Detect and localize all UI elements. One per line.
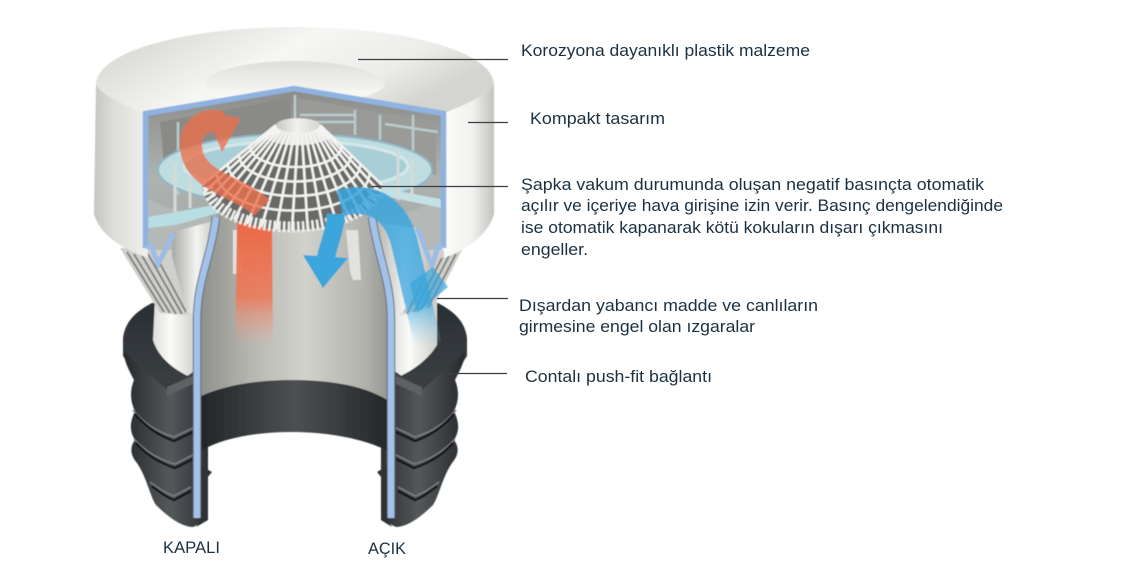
label: corrosion resistant material: Korozyona dayanıklı plastik malzeme bbox=[521, 41, 810, 60]
cone concentric ribs bbox=[217, 146, 370, 211]
vent valve illustration bbox=[94, 27, 494, 527]
rubber bellows left bbox=[124, 352, 208, 527]
lower grille cone bbox=[120, 248, 462, 315]
line 1: Şapka vakum durumunda oluşan negatif basınçta otomatik bbox=[521, 175, 985, 194]
red air flow arrow bbox=[191, 112, 262, 208]
cap top surface bbox=[96, 27, 494, 113]
cone teeth bbox=[208, 187, 376, 227]
inner cylinder fins bbox=[233, 230, 361, 280]
label: closed: KAPALI bbox=[163, 538, 220, 557]
pipe wall right outline bbox=[372, 217, 391, 518]
teal inner ring bbox=[184, 141, 408, 191]
cap left side bbox=[94, 84, 148, 258]
pipe wall left outline bbox=[197, 217, 216, 518]
cap right side bbox=[444, 84, 494, 258]
label: compact design: Kompakt tasarım bbox=[530, 109, 665, 128]
rubber collar flange bbox=[123, 303, 467, 396]
cap interior cutaway bbox=[146, 88, 442, 250]
label: push-fit connection: Contalı push-fit bağlantı bbox=[525, 367, 712, 386]
arrow shaft bbox=[325, 214, 336, 262]
neck right bbox=[391, 298, 437, 380]
flange wall left bbox=[146, 233, 174, 264]
grille slats right bbox=[403, 254, 456, 314]
lower teal shelf right bbox=[372, 186, 442, 208]
blue downward arrow bbox=[303, 214, 348, 288]
red arrow head bbox=[206, 112, 241, 152]
interior baffle structures bbox=[178, 95, 438, 195]
rubber bellows right bbox=[381, 352, 465, 527]
label: open: AÇIK bbox=[368, 539, 407, 558]
line 2: girmesine engel olan ızgaralar bbox=[519, 317, 755, 336]
inner cylinder bbox=[197, 215, 390, 402]
leader line: cap bbox=[372, 186, 508, 188]
text block: grilles bbox=[519, 296, 818, 336]
line 3: ise otomatik kapanarak kötü kokuların dışarı çıkmasını bbox=[521, 218, 943, 237]
red air flow stem bbox=[235, 222, 273, 345]
teal ring plate bbox=[158, 134, 432, 206]
cone radial ribs bbox=[202, 125, 382, 230]
cone top dome bbox=[262, 118, 331, 145]
blue air flow outlet bbox=[340, 201, 428, 345]
blue grille spread bbox=[410, 267, 448, 313]
wedge right bbox=[371, 222, 432, 314]
cut section wall bbox=[146, 88, 444, 248]
spigot lip left bbox=[196, 466, 212, 527]
right interior rods bbox=[175, 152, 412, 212]
wedge left bbox=[172, 220, 217, 314]
interior right panels bbox=[298, 98, 436, 175]
lower teal shelf left bbox=[148, 204, 222, 228]
lower interior floor bbox=[148, 198, 442, 250]
leader line: grilles bbox=[437, 298, 508, 300]
grille slats left bbox=[127, 252, 186, 314]
arrow head bbox=[303, 255, 348, 288]
flange wall right bbox=[417, 228, 443, 266]
pipe wall right bbox=[372, 217, 391, 518]
pipe wall left bbox=[197, 217, 216, 518]
line 4: engeller. bbox=[521, 240, 588, 259]
leader line: compact bbox=[468, 122, 508, 124]
interior dark roof panels bbox=[160, 98, 292, 175]
grille cone cap bbox=[202, 118, 382, 230]
line 1: Dışardan yabancı madde ve canlıların bbox=[519, 296, 818, 315]
top centre dish bbox=[205, 61, 385, 100]
inner rubber band bbox=[200, 380, 390, 452]
line 2: açılır ve içeriye hava girişine izin verir. Basınç dengelendiğinde bbox=[521, 196, 1003, 215]
leader line: seal bbox=[438, 372, 507, 374]
text block: cap function bbox=[521, 175, 1003, 259]
red swoop bbox=[191, 121, 262, 208]
neck left bbox=[153, 298, 197, 380]
spigot lip right bbox=[377, 466, 392, 527]
cone dark body bbox=[202, 120, 382, 230]
leader line: material bbox=[358, 58, 508, 60]
